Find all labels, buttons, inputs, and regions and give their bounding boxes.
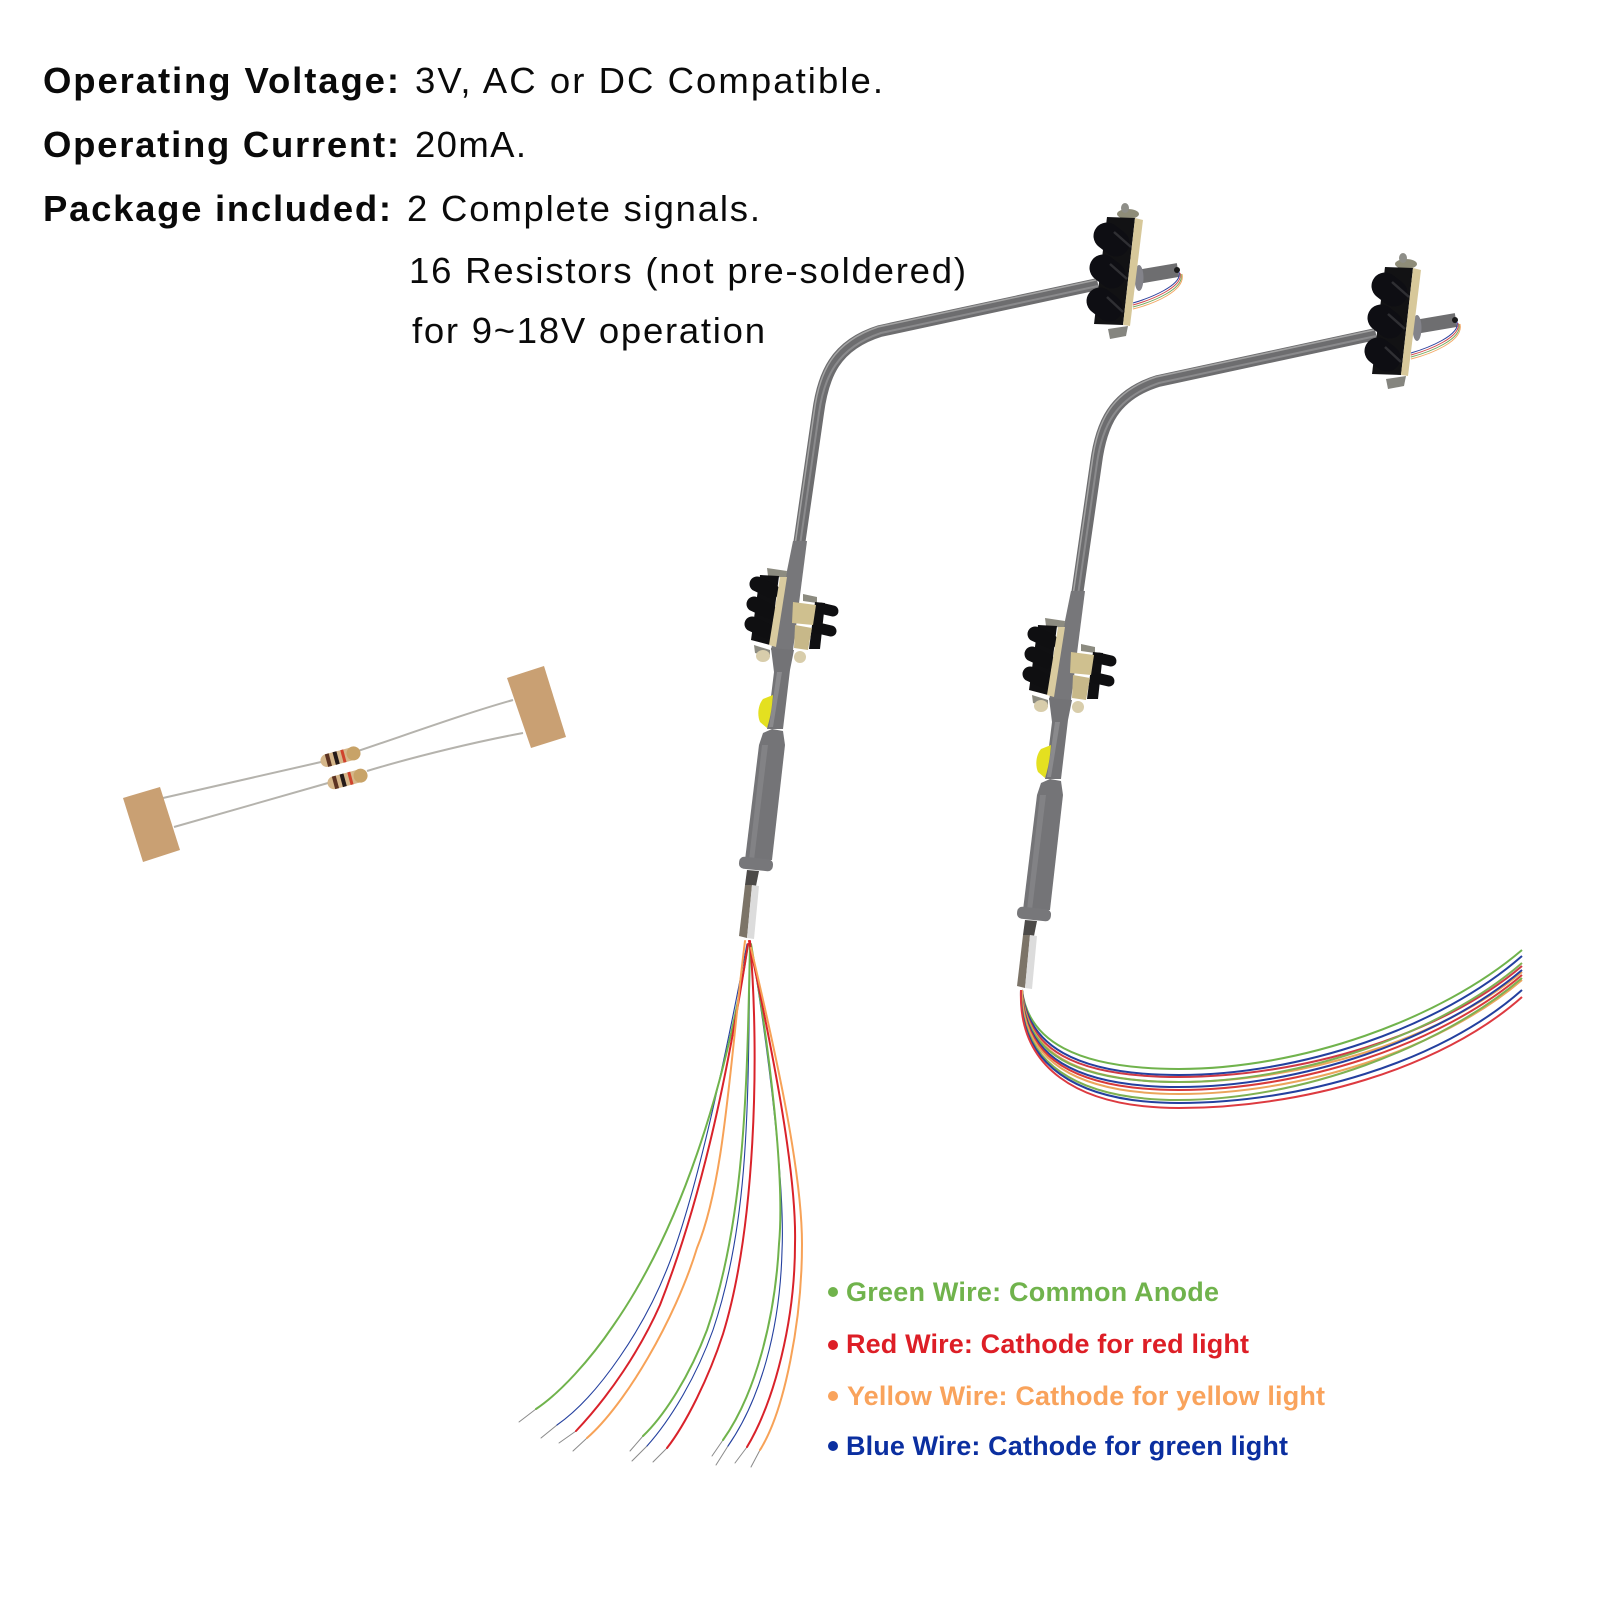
cross signal right head [792, 594, 833, 663]
pole highlight [769, 672, 782, 727]
legend: green wire: Green Wire: Common Anode [846, 1277, 1219, 1307]
curved wires of right signal [1021, 950, 1522, 1108]
legend: blue wire: Blue Wire: Cathode for green light [846, 1431, 1288, 1461]
metal tube [739, 870, 759, 939]
operating voltage line: Operating Voltage: [43, 60, 399, 101]
resistor bottom [326, 767, 369, 791]
package included line: Package included: [43, 188, 391, 229]
green wires [536, 944, 780, 1440]
blue wires [557, 944, 782, 1446]
operating voltage line: 3V, AC or DC Compatible. [415, 60, 883, 101]
flange [738, 856, 774, 872]
thin signal wires [1133, 272, 1182, 309]
wire colour legend [828, 1277, 1325, 1461]
resistors on paper tape [123, 666, 566, 862]
lamp hoods [1100, 236, 1116, 308]
base sleeve [745, 729, 785, 860]
legend: red wire: Red Wire: Cathode for red light [846, 1329, 1249, 1359]
main signal head [1094, 203, 1182, 339]
operating current line: 20mA. [415, 124, 526, 165]
resistor top [319, 745, 362, 769]
red wires [576, 941, 795, 1448]
cross signal left head [751, 568, 787, 662]
traffic signal left [738, 203, 1182, 939]
traffic signal right [1016, 253, 1460, 989]
operating voltage line [43, 60, 883, 101]
lower pole [767, 648, 794, 729]
legend: yellow wire: Yellow Wire: Cathode for yellow light [847, 1381, 1325, 1411]
resistor leads [163, 700, 523, 827]
yellow indicator [758, 695, 773, 728]
operation range line: for 9~18V operation [412, 310, 765, 351]
specifications text block [43, 60, 966, 351]
pole collar [771, 541, 807, 650]
orange wires [587, 941, 802, 1450]
sleeve highlight [749, 745, 768, 860]
paper tape left [123, 787, 180, 862]
bare wire tips [519, 1409, 760, 1467]
overhead arm and upper pole [795, 280, 1098, 545]
operating current line: Operating Current: [43, 124, 399, 165]
paper tape right [507, 666, 566, 748]
fanned wires of left signal [519, 941, 802, 1467]
right stub arm [1137, 270, 1178, 277]
resistors line: 16 Resistors (not pre-soldered) [409, 250, 966, 291]
package included line: 2 Complete signals. [407, 188, 760, 229]
package included line [43, 188, 760, 229]
